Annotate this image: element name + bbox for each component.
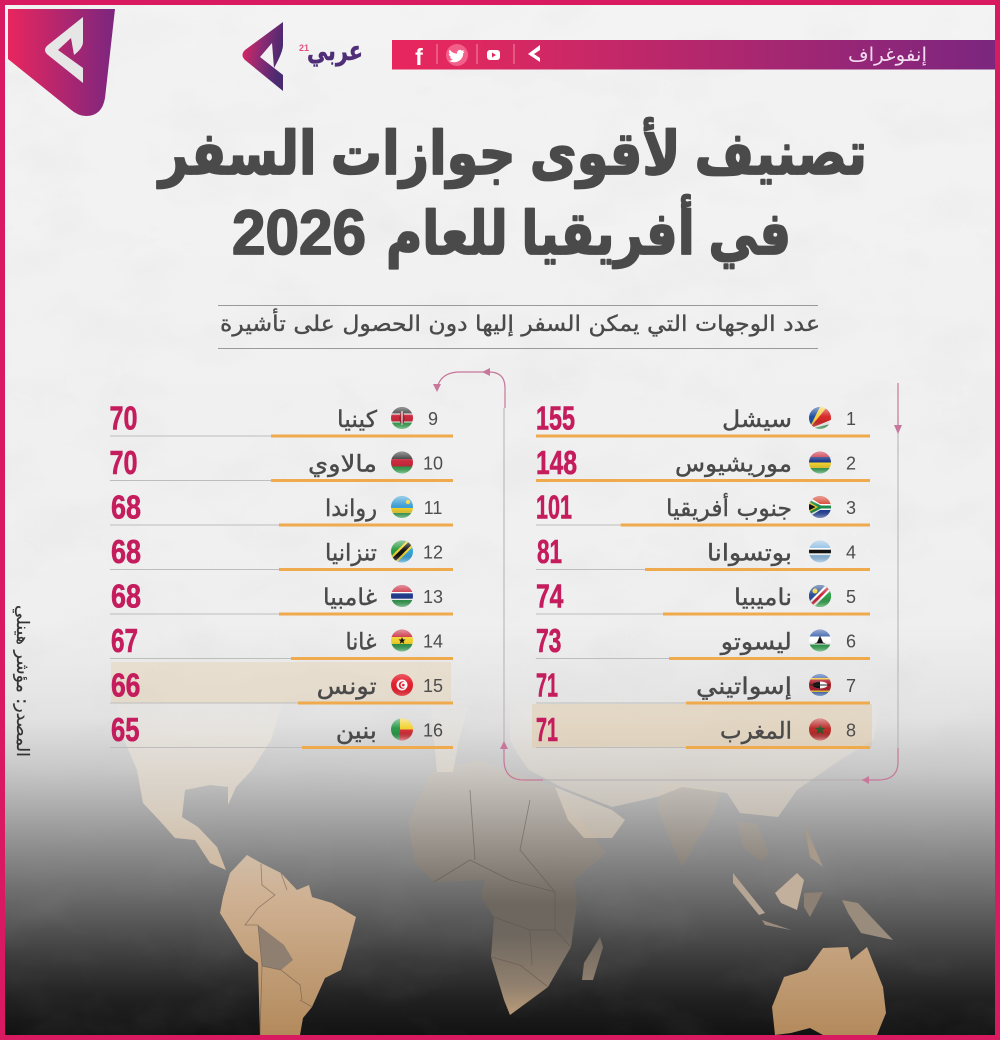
row 11 Rwanda: 68 <box>111 488 141 525</box>
row 15 Tunisia: 66 <box>111 666 140 703</box>
row 10 Malawi: مالاوي <box>308 452 377 478</box>
flow connector arrows <box>433 368 902 784</box>
row 9 Kenya: 70 <box>110 399 138 436</box>
world map <box>115 695 893 1035</box>
row 14 Ghana: 67 <box>111 622 138 659</box>
row 4 Botswana <box>536 540 870 571</box>
row 16 Benin: 65 <box>111 711 140 748</box>
row 11 Rwanda: 11 <box>424 498 442 518</box>
row 13 Gambia: غامبيا <box>323 585 377 611</box>
row 6 Lesotho: ليسوتو <box>720 630 792 656</box>
row 16 Benin: 16 <box>423 720 443 740</box>
icon: facebook: f <box>415 44 423 70</box>
row 4 Botswana: 4 <box>846 542 856 562</box>
row 15 Tunisia: تونس <box>317 674 377 700</box>
row 11 Rwanda <box>110 495 453 526</box>
title: تصنيف لأقوى جوازات السفر <box>156 117 867 189</box>
row 2 Mauritius: موريشيوس <box>675 452 792 478</box>
row 10 Malawi: 10 <box>423 454 443 474</box>
row 13 Gambia <box>110 584 453 616</box>
row 1 Seychelles: 155 <box>536 399 575 436</box>
row 2 Mauritius <box>536 450 870 482</box>
row 13 Gambia: 13 <box>423 587 443 607</box>
row 10 Malawi: 70 <box>110 444 138 481</box>
band label: إنفوغراف <box>848 44 927 67</box>
highlight: Tunisia <box>111 662 451 703</box>
row 12 Tanzania: 68 <box>111 533 141 570</box>
logo superscript: 21 <box>299 43 309 53</box>
row 8 Morocco: 71 <box>536 711 558 748</box>
row 9 Kenya <box>110 406 453 438</box>
row 6 Lesotho <box>536 628 870 660</box>
row 16 Benin <box>110 718 453 749</box>
row 7 Eswatini <box>536 673 870 704</box>
row 5 Namibia: ناميبيا <box>734 585 792 611</box>
row 3 South Africa: 101 <box>536 488 572 525</box>
row 2 Mauritius: 2 <box>846 454 856 474</box>
band dividers <box>437 44 514 64</box>
row 9 Kenya: كينيا <box>337 407 377 433</box>
header band <box>392 40 995 70</box>
row 9 Kenya: 9 <box>428 409 438 429</box>
title: في أفريقيا للعام <box>386 194 791 269</box>
logo mark <box>242 22 283 91</box>
panel: ranks 1 to 8 <box>536 399 870 748</box>
icon: small chevron <box>528 45 540 62</box>
row 12 Tanzania <box>110 540 453 571</box>
icon: youtube <box>487 50 500 60</box>
row 5 Namibia <box>536 584 870 616</box>
row 6 Lesotho: 73 <box>536 622 561 659</box>
row 8 Morocco <box>536 718 870 749</box>
row 12 Tanzania: 12 <box>423 542 443 562</box>
row 3 South Africa <box>536 488 870 525</box>
row 14 Ghana <box>110 628 453 660</box>
arabi21 logo <box>242 22 363 91</box>
row 5 Namibia: 5 <box>846 587 856 607</box>
row 13 Gambia: 68 <box>111 577 141 614</box>
row 7 Eswatini: 71 <box>536 666 558 703</box>
row 6 Lesotho: 6 <box>846 632 856 652</box>
row 11 Rwanda: رواندا <box>325 496 377 522</box>
logo wordmark: عربي <box>307 36 363 67</box>
row 3 South Africa: جنوب أفريقيا <box>666 493 792 522</box>
title <box>156 117 867 269</box>
row 1 Seychelles: سيشل <box>722 407 792 433</box>
source note: المصدر: مؤشر هينلي <box>12 605 32 757</box>
row 10 Malawi <box>110 450 453 482</box>
row 14 Ghana: 14 <box>423 632 443 652</box>
row 4 Botswana: 81 <box>537 533 562 570</box>
row 15 Tunisia: 15 <box>423 676 443 696</box>
row 12 Tanzania: تنزانيا <box>325 540 377 566</box>
row 16 Benin: بنين <box>336 718 377 744</box>
row 1 Seychelles <box>536 406 870 438</box>
icon: twitter <box>446 44 468 66</box>
row 4 Botswana: بوتسوانا <box>707 540 792 566</box>
corner logo pennant <box>8 9 115 116</box>
title: 2026 <box>232 198 366 268</box>
subtitle <box>218 306 820 348</box>
highlight: Morocco <box>532 704 872 748</box>
row 7 Eswatini: 7 <box>846 676 856 696</box>
panel: ranks 9 to 16 <box>110 399 453 748</box>
row 7 Eswatini: إسواتيني <box>696 674 792 700</box>
row 2 Mauritius: 148 <box>536 444 577 481</box>
row 14 Ghana: غانا <box>346 630 376 656</box>
row 3 South Africa: 3 <box>846 498 856 518</box>
row 8 Morocco: المغرب <box>720 718 792 744</box>
row 1 Seychelles: 1 <box>846 409 856 429</box>
subtitle: عدد الوجهات التي يمكن السفر إليها دون الحصول على تأشيرة <box>220 308 820 337</box>
row 5 Namibia: 74 <box>536 577 564 614</box>
row 15 Tunisia <box>110 673 453 704</box>
row 8 Morocco: 8 <box>846 720 856 740</box>
